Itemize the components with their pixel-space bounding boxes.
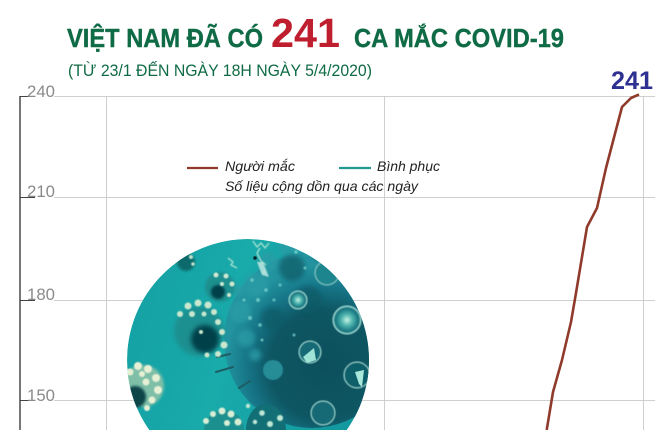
large virus bbox=[215, 240, 369, 428]
small virus bottom right bbox=[246, 404, 286, 430]
title: 241 bbox=[271, 10, 340, 56]
chart grid bbox=[54, 96, 655, 430]
y axis: 210 bbox=[27, 182, 55, 201]
legend: Số liệu cộng dồn qua các ngày bbox=[225, 178, 419, 194]
y axis: 150 bbox=[27, 386, 55, 405]
y axis bbox=[20, 82, 55, 430]
subtitle: (TỪ 23/1 ĐẾN NGÀY 18H NGÀY 5/4/2020) bbox=[68, 61, 372, 80]
small virus upper bbox=[205, 272, 235, 302]
title: VIỆT NAM ĐÃ CÓ bbox=[67, 23, 263, 53]
value label: 241 bbox=[611, 67, 653, 95]
spike stems bbox=[216, 354, 250, 388]
y axis: 180 bbox=[27, 285, 55, 304]
pale crown at top bbox=[228, 241, 269, 268]
small virus center bbox=[174, 300, 228, 358]
surface rings bbox=[263, 261, 370, 425]
legend: Người mắc bbox=[225, 158, 295, 174]
legend bbox=[187, 158, 440, 194]
small virus bottom bbox=[203, 408, 244, 430]
legend: Bình phục bbox=[377, 158, 440, 174]
line chart: người mắc bbox=[547, 94, 639, 430]
small virus top bbox=[177, 253, 195, 271]
title: CA MẮC COVID-19 bbox=[354, 23, 564, 53]
virus image bbox=[127, 239, 369, 430]
small virus left bbox=[122, 362, 164, 411]
y axis: 240 bbox=[27, 82, 55, 101]
surface spots bbox=[242, 250, 306, 342]
title bbox=[67, 10, 564, 56]
